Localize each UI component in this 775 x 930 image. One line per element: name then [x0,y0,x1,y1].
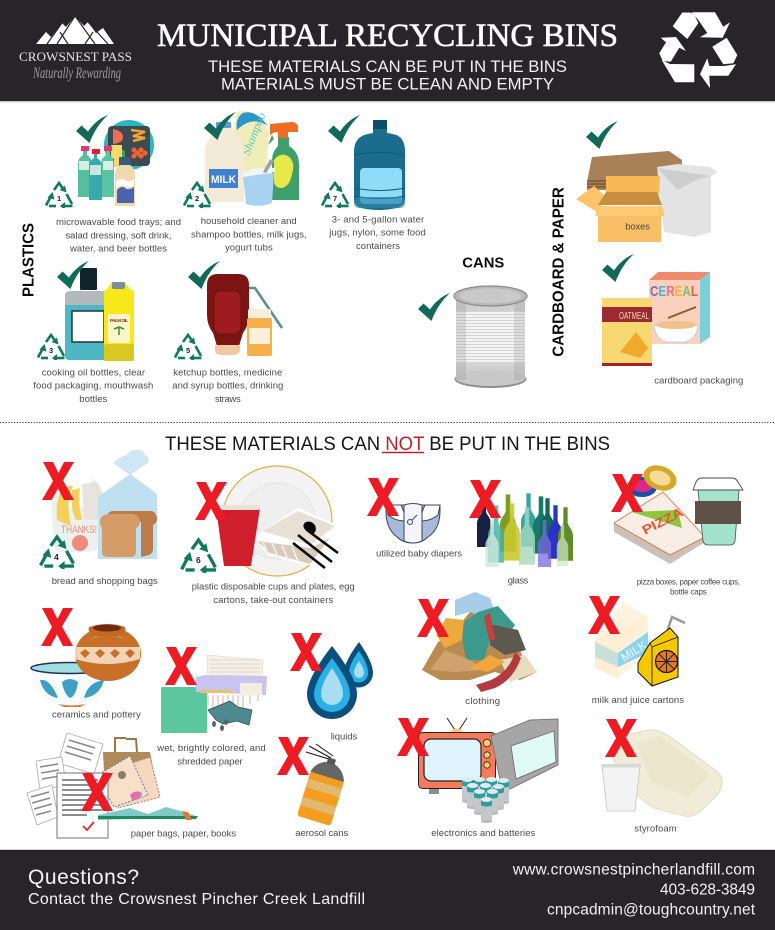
header panel [0,0,775,102]
item: pizza boxes, cups, caps [611,461,743,597]
recycling code 1: 1 [57,194,61,203]
caption: ketchup bottles, medicine [173,367,282,378]
subtitle: THESE MATERIALS CAN BE PUT IN THE BINS [208,57,567,76]
item: liquids [290,633,373,742]
illustration: plate, red cup, egg carton, cutlery [215,466,340,576]
caption: wet, brightly colored, and [156,743,266,754]
item: wet and shredded paper [156,647,267,767]
illustration: clothing pile [422,592,537,692]
subtitle: MATERIALS MUST BE CLEAN AND EMPTY [221,74,554,94]
questions heading: Questions? [28,866,139,889]
item: boxes [576,121,718,242]
logo tagline: Naturally Rewarding [32,65,121,82]
illustration: water drops [307,642,373,719]
X mark [165,647,197,685]
item: plastic disposables [182,466,355,606]
title: MUNICIPAL RECYCLING BINS [157,18,618,54]
caption [56,217,181,255]
caption: and syrup bottles, drinking [172,381,283,392]
illustration: milk carton and juice box: MILK [618,638,649,665]
illustration: milk jug, shampoo, spray, yogurt [205,110,299,206]
X mark [397,718,429,756]
caption: styrofoam [634,823,677,834]
caption: jugs, nylon, some food [328,228,426,239]
check mark [76,115,108,143]
caption: cartons, take-out containers [213,595,334,606]
item: plastic 2 [184,110,307,254]
caption: straws [215,394,241,405]
heading: cardboard and paper: CARDBOARD & PAPER [550,187,567,357]
caption: utilized baby diapers [376,548,462,559]
dotted divider [0,422,775,424]
caption: boxes [625,221,650,232]
recycling code 2: 2 [195,194,199,203]
illustration: TV, monitor, batteries [418,718,558,823]
illustration: bread and shopping bags: THANKS! [61,524,97,536]
caption [172,367,283,405]
contact details: 403-628-3849 [660,881,755,898]
caption [192,582,355,606]
X mark [195,482,227,520]
caption: 3- and 5-gallon water [332,214,424,225]
item: milk and juice cartons [588,596,685,706]
item: cans [418,256,527,388]
X mark [42,462,74,500]
heading: plastics: PLASTICS [20,223,38,297]
X mark [81,773,113,811]
caption: food packaging, mouthwash [33,381,153,392]
item: clothing [417,592,537,707]
subtitle [208,57,567,94]
check mark [188,261,220,289]
X mark [605,719,637,757]
caption: household cleaner and [201,216,297,227]
X mark [417,599,449,637]
item: plastic 1 [46,115,181,255]
illustration: foam clamshell and cup [601,730,722,816]
caption: clothing [465,696,500,707]
heading: not accepted materials: THESE MATERIALS CAN NOT BE PUT IN THE BINS [165,433,610,455]
logo wordmark: CROWSNEST PASS [19,49,132,64]
icon: mountains [36,16,114,44]
illustration: water jug [354,120,405,210]
check mark [57,261,89,289]
caption: microwavable food trays; and [56,217,181,228]
recycling code 5: 5 [186,346,190,355]
caption: water, and beer bottles [69,244,167,255]
caption: glass [508,576,529,586]
caption: milk and juice cartons [592,695,684,706]
heading: cans: CANS [462,256,505,272]
recycling code 3 [38,335,64,362]
X mark [367,478,399,516]
item: plastic 5 [172,261,283,405]
caption: cardboard packaging [654,375,743,386]
illustration: food tray and bottles [78,120,154,206]
caption: shampoo bottles, milk jugs, [191,229,307,240]
caption: bottles [79,394,108,405]
item: cardboard packaging [602,254,743,386]
caption: containers [356,241,400,252]
item: bags [41,450,158,587]
caption [637,577,740,597]
illustration: bowl and pot [31,624,141,707]
item: paper, bags, books [27,733,236,840]
caption: electronics and batteries [431,828,536,839]
recycling code 5 [175,335,202,362]
illustration: spray can [297,744,349,826]
check mark [418,293,450,321]
check mark [204,112,236,140]
caption [156,743,266,767]
item: glass [469,480,573,586]
caption: cooking oil bottles, clear [42,367,145,378]
illustration: cereal and oatmeal boxes: OATMEAL [619,311,649,322]
contact details: cnpcadmin@toughcountry.net [547,901,756,918]
caption: salad dressing, soft drink, [66,230,172,241]
illustration: glass bottles [477,493,573,567]
caption: yogurt tubs [225,243,273,254]
contact line: Contact the Crowsnest Pincher Creek Landfill [28,891,365,908]
X mark [41,608,73,646]
check mark [328,115,360,143]
X mark [611,474,643,512]
illustration: cereal and oatmeal boxes: CEREAL [650,283,698,300]
illustration: pizza box, coffee cup, bottle caps: PIZZA [640,504,686,538]
item: ceramics [31,608,141,721]
caption: bread and shopping bags [52,576,158,587]
illustration: cardboard boxes [576,151,718,242]
caption [33,367,153,405]
caption: paper bags, paper, books [131,829,236,840]
X mark [277,737,309,775]
caption: pizza boxes, paper coffee cups, [637,577,740,586]
illustration: paper stack, bag, envelopes, book [27,733,198,838]
logo: Crowsnest Pass [19,16,132,82]
illustration: diaper [386,504,440,543]
illustration: tin can [454,286,527,388]
X mark [588,596,620,634]
X mark [290,633,322,671]
item: styrofoam [601,719,722,834]
contact details [512,861,756,918]
caption: liquids [331,731,358,742]
caption: bottle caps [670,588,707,597]
footer panel [0,849,775,930]
caption: plastic disposable cups and plates, egg [192,582,355,593]
caption: aerosol cans [295,828,349,839]
item: plastic 3 [33,261,153,405]
illustration: folder, shredder, wet paper [161,655,267,733]
icon: recycling symbol [659,12,737,88]
recycling code 3: 3 [49,346,53,355]
recycling code 4: 4 [54,552,59,562]
caption [191,216,307,254]
recycling code 2 [184,183,210,210]
caption [328,214,426,252]
illustration: mouthwash and oil bottles [65,268,134,361]
illustration: mouthwash and oil bottles: PALM OIL [110,318,128,323]
illustration: cereal and oatmeal boxes [602,272,710,366]
recycling code 6 [182,540,216,575]
illustration: milk jug, shampoo, spray, yogurt: MILK [211,174,236,186]
contact details: www.crowsnestpincherlandfill.com [512,861,755,878]
check mark [586,121,618,149]
caption: shredded paper [177,756,243,767]
item: electronics and batteries [397,718,558,839]
X mark [469,480,501,518]
illustration: milk jug, shampoo, spray, yogurt: Shampoo [239,110,269,157]
caption: ceramics and pottery [52,710,141,721]
check mark [602,254,634,282]
recycling code 7: 7 [333,194,337,203]
item: aerosol cans [277,737,349,839]
illustration: ketchup, medicine bottle, straw [207,274,282,356]
recycling code 6: 6 [196,555,201,565]
item: diapers [367,478,462,559]
item: plastic 7 [322,115,426,252]
